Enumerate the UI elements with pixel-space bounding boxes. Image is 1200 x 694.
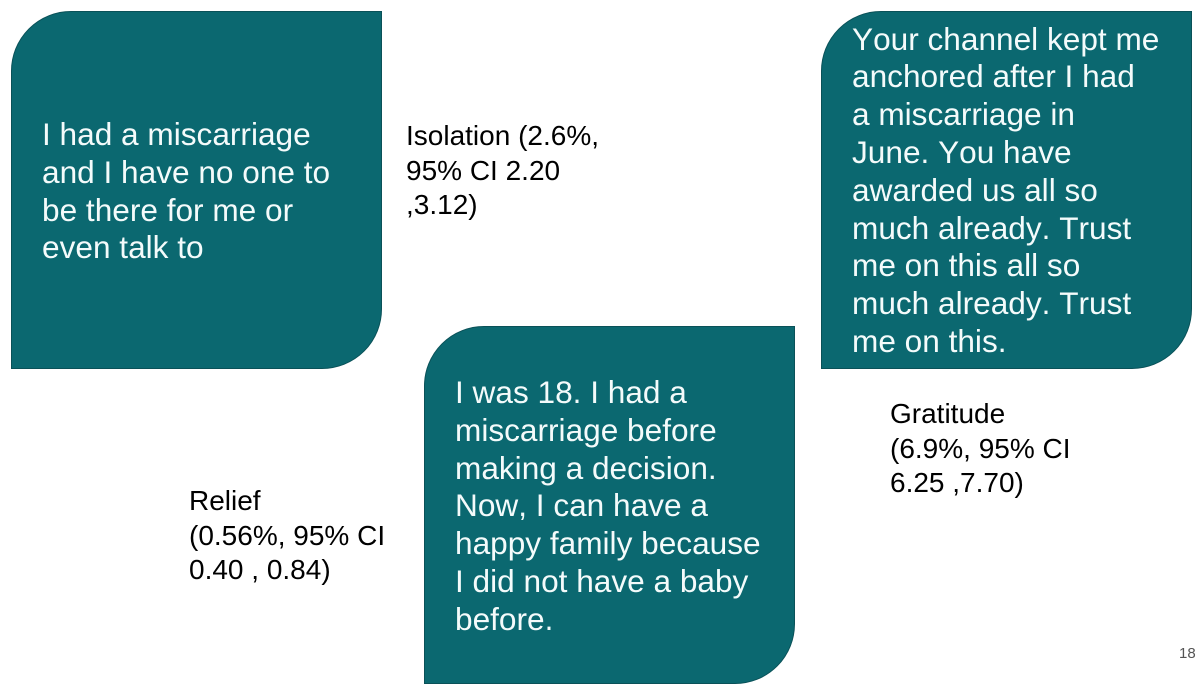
label: gratitude statistic: 6.25 ,7.70) [890, 467, 1024, 498]
label: gratitude statistic [890, 398, 1071, 498]
panel: isolation quote [11, 11, 382, 369]
quote text: isolation: I had a miscarriage [42, 116, 311, 152]
label: relief statistic: Relief [189, 485, 261, 516]
quote text: gratitude: a miscarriage in [852, 96, 1075, 132]
quote text: relief: I was 18. I had a [455, 374, 687, 410]
quote text: relief: I did not have a baby [455, 563, 748, 599]
quote text: gratitude: awarded us all so [852, 172, 1098, 208]
quote text: gratitude [852, 21, 1159, 359]
quote text: gratitude: me on this. [852, 323, 1007, 359]
quote text: gratitude: June. You have [852, 134, 1072, 170]
quote text: gratitude: much already. Trust [852, 210, 1131, 246]
quote text: isolation: and I have no one to [42, 154, 330, 190]
quote text: gratitude: me on this all so [852, 247, 1080, 283]
quote text: gratitude: anchored after I had [852, 58, 1135, 94]
panel: gratitude quote [821, 11, 1192, 369]
label: isolation statistic: ,3.12) [406, 189, 478, 220]
quote text: relief: Now, I can have a [455, 487, 708, 523]
page number: 18 [1179, 645, 1196, 662]
quote text: isolation: be there for me or [42, 192, 293, 228]
quote text: gratitude: much already. Trust [852, 285, 1131, 321]
label: relief statistic: 0.40 , 0.84) [189, 554, 331, 585]
panel: relief quote [424, 326, 795, 684]
label: relief statistic: (0.56%, 95% CI [189, 520, 385, 550]
label: relief statistic [189, 485, 385, 585]
quote text: isolation: even talk to [42, 229, 204, 265]
label: gratitude statistic: Gratitude [890, 398, 1005, 429]
quote text: relief: happy family because [455, 525, 761, 561]
label: isolation statistic: 95% CI 2.20 [406, 154, 560, 186]
quote text: relief: making a decision. [455, 450, 717, 486]
quote text: relief: miscarriage before [455, 412, 717, 448]
quote text: relief: before. [455, 601, 553, 637]
label: gratitude statistic: (6.9%, 95% CI [890, 432, 1071, 464]
quote text: relief [455, 374, 761, 637]
quote text: isolation [42, 116, 330, 265]
quote text: gratitude: Your channel kept me [852, 21, 1159, 57]
label: isolation statistic: Isolation (2.6%, [406, 120, 599, 151]
label: isolation statistic [406, 120, 599, 220]
